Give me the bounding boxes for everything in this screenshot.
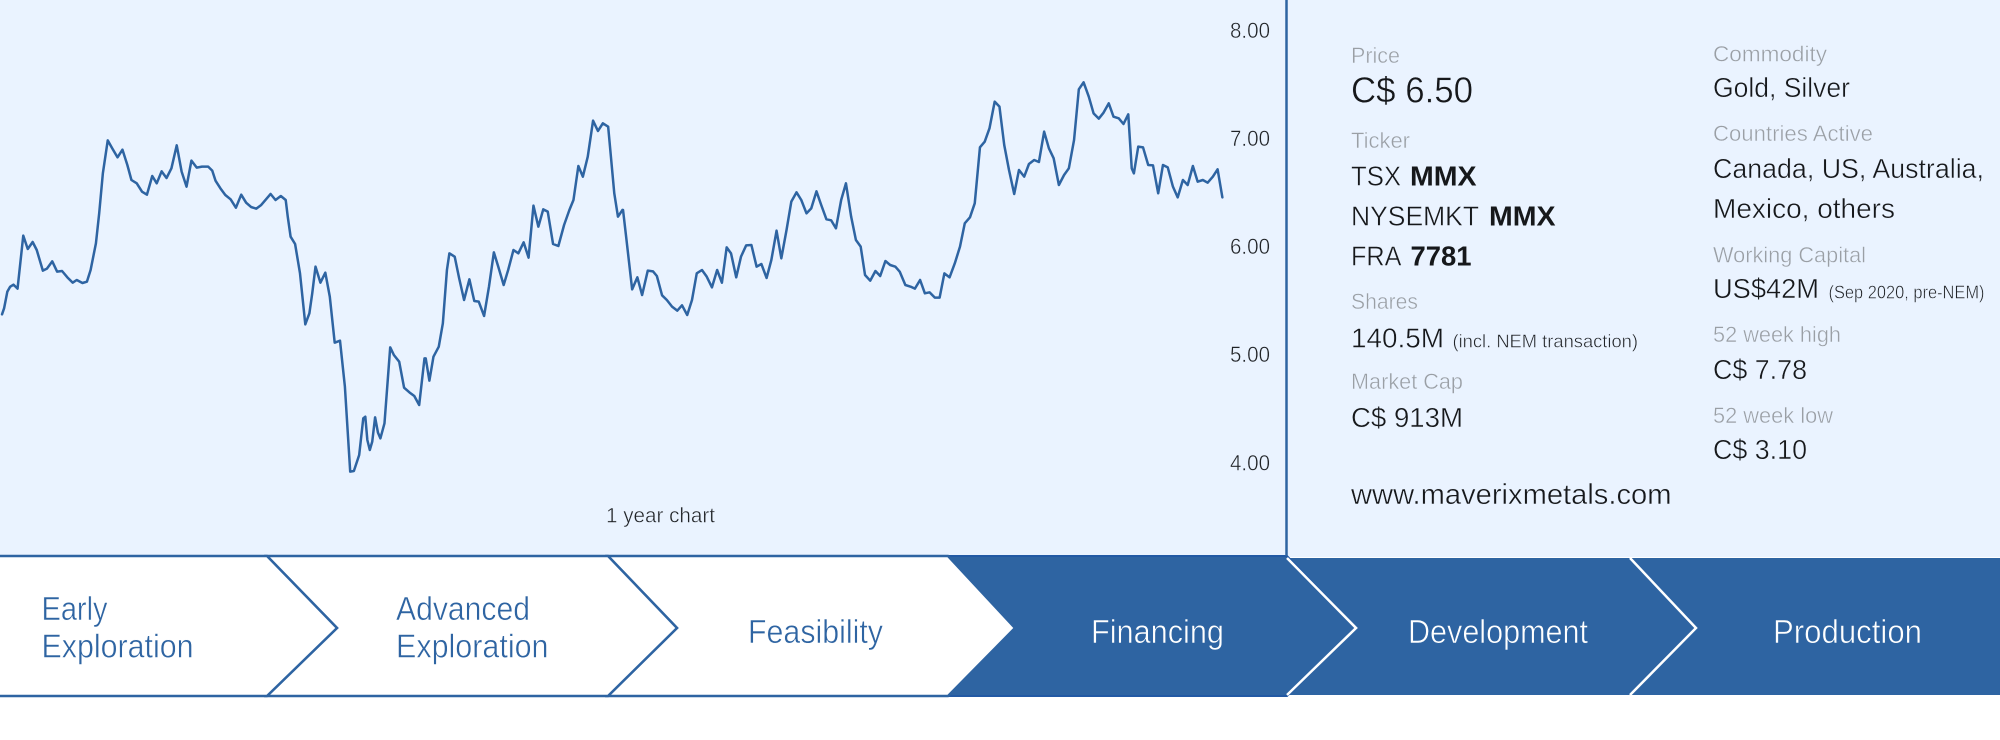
price axis labels: 8.00 <box>1230 18 1270 43</box>
panel: stats background <box>1287 0 2000 557</box>
chevron: early exploration <box>0 556 337 696</box>
stat: market cap: Market Cap <box>1351 369 1463 394</box>
stat: working capital: US$42M <box>1713 273 1819 304</box>
stat: ticker: FRA <box>1351 240 1402 272</box>
chevron: advanced exploration <box>267 556 677 696</box>
chevron: early exploration: Early <box>42 590 108 627</box>
stat: commodity: Commodity <box>1713 42 1827 66</box>
stat: ticker: NYSEMKT <box>1351 200 1479 232</box>
stat: price: Price <box>1351 43 1400 68</box>
stat: price: C$ 6.50 <box>1351 70 1473 110</box>
chevron: advanced exploration: Exploration <box>396 628 548 664</box>
chevron: development: Development <box>1408 613 1588 650</box>
stat: working capital: (Sep 2020, pre-NEM) <box>1828 282 1984 302</box>
stat: countries active: Countries Active <box>1713 121 1873 146</box>
chevron: advanced exploration: Advanced <box>396 590 530 627</box>
stat: working capital <box>1713 242 1984 304</box>
stat: ticker: TSX <box>1351 160 1401 192</box>
stat: 52 week low: C$ 3.10 <box>1713 434 1807 465</box>
stat: ticker <box>1351 128 1556 272</box>
stat: countries active: Canada, US, Australia, <box>1713 153 1984 184</box>
stat: 52 week high: 52 week high <box>1713 322 1841 347</box>
stat: market cap: C$ 913M <box>1351 402 1463 433</box>
chevron: feasibility <box>608 556 1015 696</box>
panel: chart background <box>0 0 1287 556</box>
divider between chart and stats <box>1285 0 1288 556</box>
stat: 52 week low: 52 week low <box>1713 403 1833 428</box>
stat: ticker: MMX <box>1410 160 1477 192</box>
price axis labels <box>1230 18 1270 476</box>
chevron: early exploration: Exploration <box>42 628 194 664</box>
chart: one year share price line <box>2 82 1222 472</box>
chevron: financing: Financing <box>1091 613 1224 650</box>
stat: ticker: Ticker <box>1351 128 1410 153</box>
price axis labels: 6.00 <box>1230 234 1270 259</box>
stat: shares: 140.5M <box>1351 322 1444 354</box>
stat: price <box>1351 43 1473 110</box>
stat: shares: (incl. NEM transaction) <box>1452 332 1638 352</box>
chevron: financing <box>948 556 1356 696</box>
stat: commodity <box>1713 42 1850 103</box>
stat: 52 week low <box>1713 403 1833 465</box>
stat: commodity: Gold, Silver <box>1713 72 1850 103</box>
website url: www.maverixmetals.com <box>1350 479 1672 511</box>
stat: 52 week high <box>1713 322 1841 385</box>
chart caption: 1 year chart <box>606 504 715 528</box>
chevron: feasibility: Feasibility <box>748 613 883 650</box>
stat: countries active: Mexico, others <box>1713 193 1895 224</box>
stat: ticker: MMX <box>1489 200 1556 232</box>
stat: working capital: Working Capital <box>1713 242 1866 268</box>
stat: countries active <box>1713 121 1984 224</box>
chevron: production: Production <box>1773 613 1922 650</box>
price axis labels: 5.00 <box>1230 342 1270 367</box>
price axis labels: 4.00 <box>1230 450 1270 476</box>
chevron: development <box>1287 558 1696 695</box>
stat: 52 week high: C$ 7.78 <box>1713 354 1807 385</box>
stat: shares: Shares <box>1351 289 1418 314</box>
stat: shares <box>1351 289 1638 354</box>
price axis labels: 7.00 <box>1230 126 1270 151</box>
stat: ticker: 7781 <box>1410 240 1472 272</box>
stat: market cap <box>1351 369 1463 433</box>
chevron: production <box>1630 558 2000 695</box>
